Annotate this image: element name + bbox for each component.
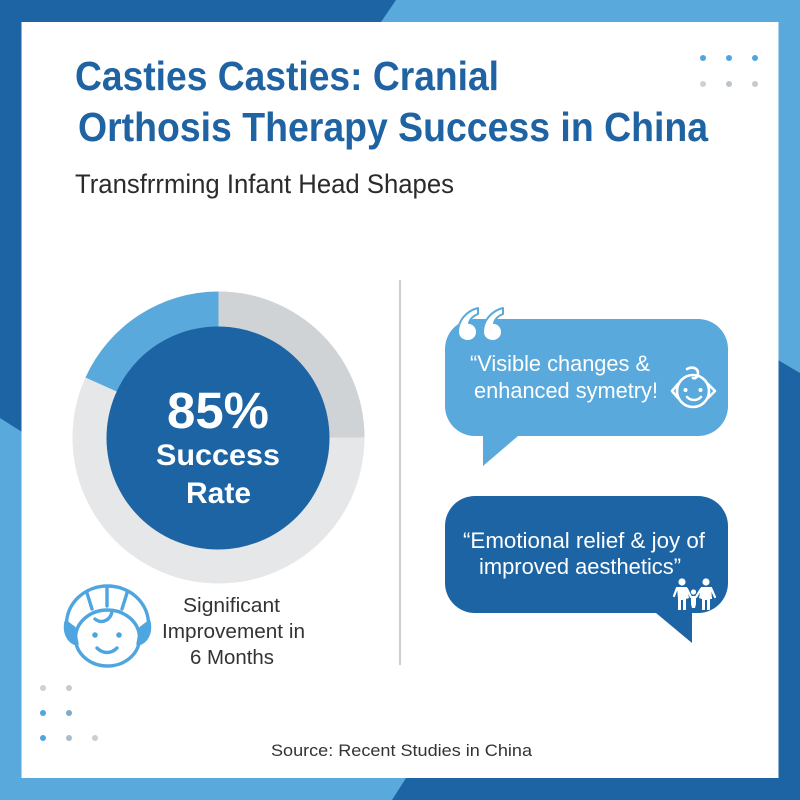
quote text <box>470 351 658 403</box>
title: Casties Casties: Cranial <box>75 53 499 99</box>
subtitle: Transfrrming Infant Head Shapes <box>75 169 454 199</box>
quote text <box>463 528 706 579</box>
success rate label <box>156 439 280 510</box>
quote text: “Visible changes & <box>470 351 650 376</box>
quote text: improved aesthetics” <box>479 554 681 579</box>
icon: family <box>674 578 715 610</box>
speech bubble: emotional relief <box>445 496 728 643</box>
quote text: enhanced symetry! <box>474 378 658 403</box>
improvement caption: Improvement in <box>162 621 305 643</box>
success rate value: 85% <box>167 382 269 439</box>
improvement caption: Significant <box>183 595 280 617</box>
donut gray segment <box>218 292 364 438</box>
speech bubble: visible changes <box>445 308 728 466</box>
quote text: “Emotional relief & joy of <box>463 528 706 553</box>
success rate label: Success <box>156 439 280 472</box>
success rate label: Rate <box>186 477 251 510</box>
bubble shape <box>445 319 728 466</box>
source note: Source: Recent Studies in China <box>271 741 533 760</box>
donut ring <box>72 292 364 584</box>
improvement caption <box>162 595 305 669</box>
donut chart <box>72 292 364 584</box>
title <box>75 53 709 150</box>
decorative dots: top right <box>700 55 758 87</box>
donut blue segment <box>86 292 218 438</box>
decorative dots: bottom left <box>40 685 98 741</box>
icon: baby wearing helmet <box>65 586 150 666</box>
improvement caption: 6 Months <box>190 647 274 669</box>
icon: quotation marks <box>458 308 503 341</box>
bubble shape <box>445 496 728 643</box>
donut centre <box>106 326 330 550</box>
icon: baby face <box>672 368 715 407</box>
title: Orthosis Therapy Success in China <box>78 104 709 150</box>
